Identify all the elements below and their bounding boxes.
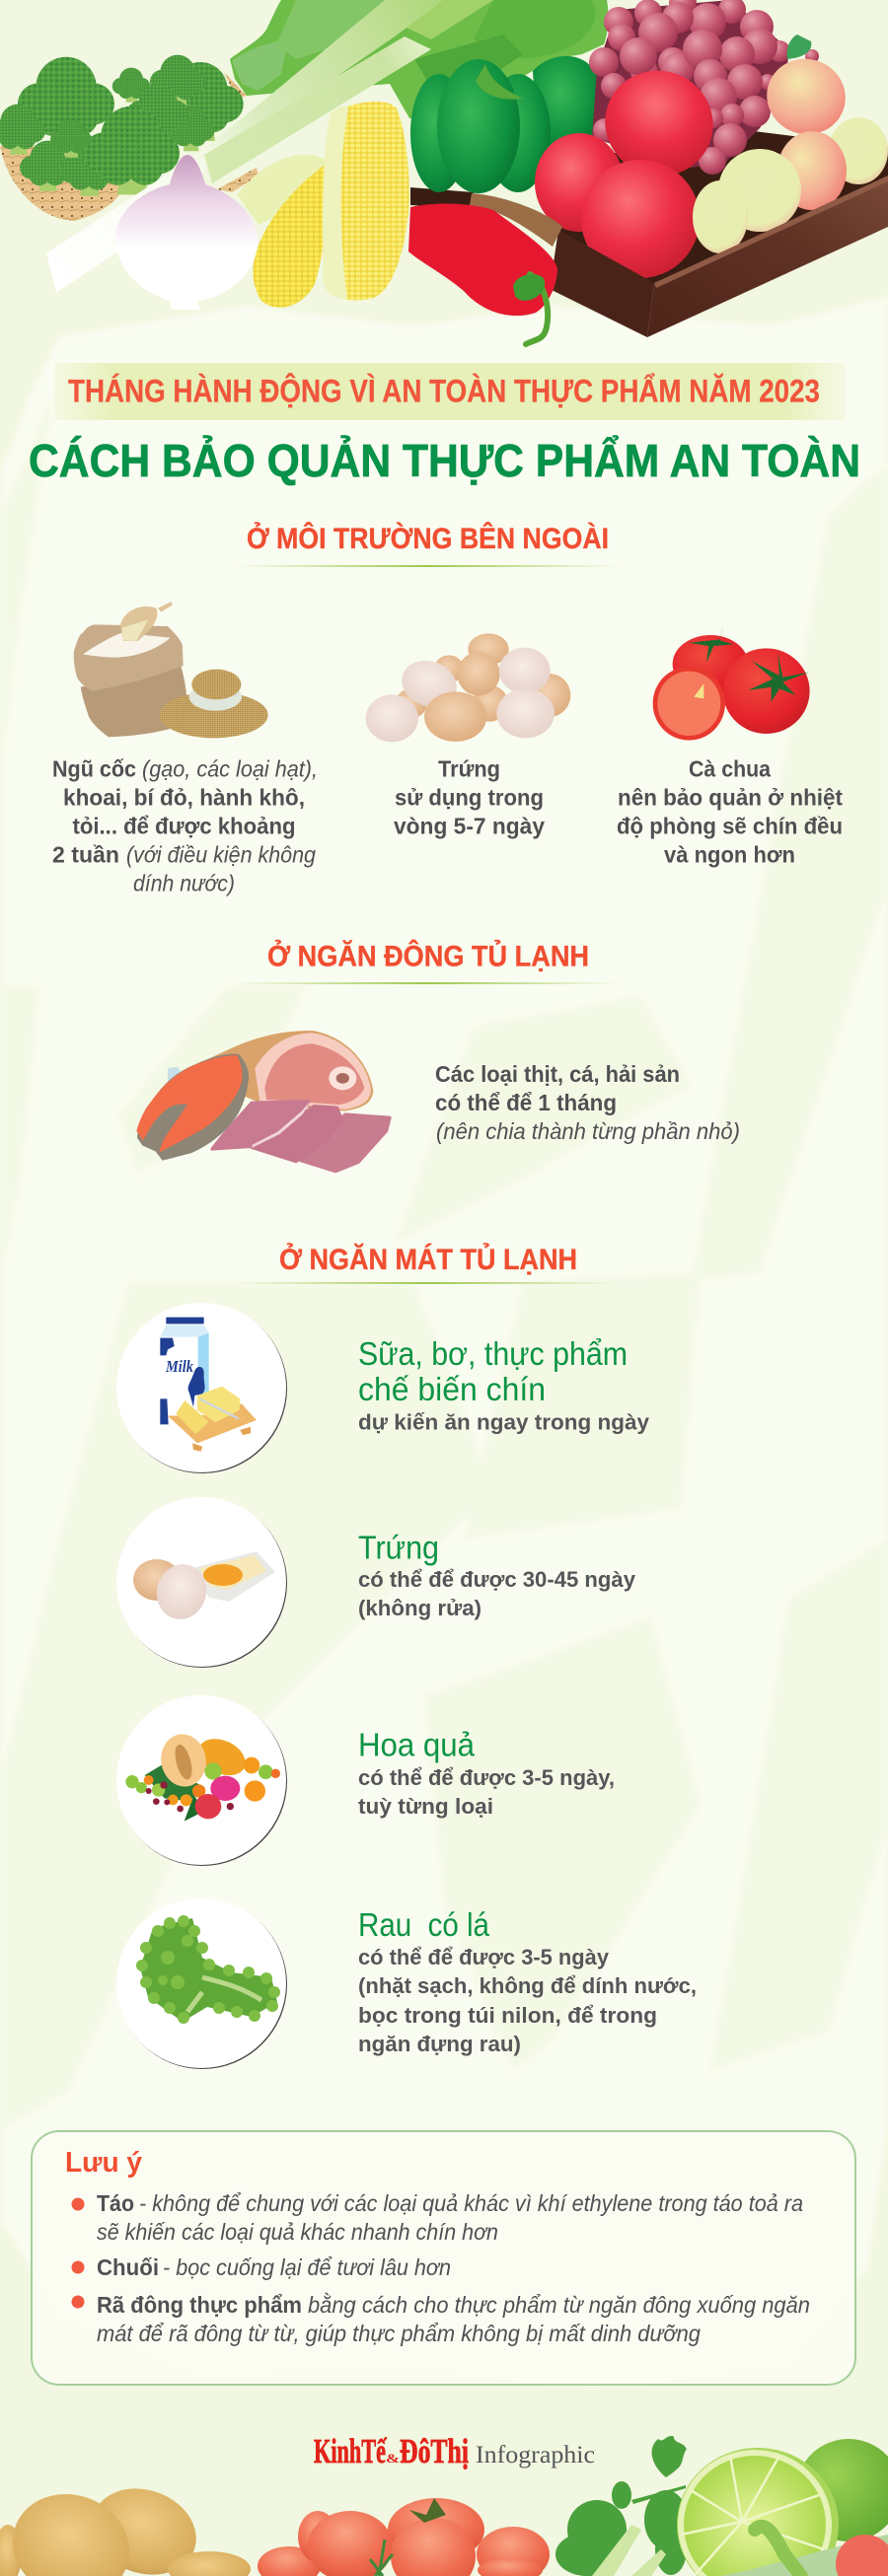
icon: rice sack	[74, 602, 186, 737]
text: dairy	[358, 1335, 650, 1434]
icon: whole lime	[796, 2439, 888, 2541]
heading: outside: Ở MÔI TRƯỜNG BÊN NGOÀI	[247, 522, 609, 555]
panel: freezer	[136, 1031, 740, 1172]
text: dairy: chế biến chín	[358, 1371, 546, 1407]
text: eggs fridge: có thể để được 30-45 ngày	[358, 1567, 636, 1592]
text: freezer: có thể để 1 tháng	[435, 1090, 617, 1115]
icon: meat and fish	[136, 1031, 390, 1172]
logo: KinhTế	[314, 2432, 388, 2470]
icon: eggs and bowl	[116, 1497, 287, 1668]
text: grains: (gạo, các loại hạt),	[142, 755, 318, 781]
text: grains	[52, 755, 318, 895]
note: apple: - không để chung với các loại quả khác vì khí ethylene trong táo toả ra	[139, 2190, 803, 2216]
illustration: bottom vegetables	[0, 2436, 888, 2576]
panel: dairy	[116, 1303, 650, 1473]
note: apple: Táo	[97, 2190, 134, 2216]
icon: tray interior	[410, 128, 888, 286]
icon: grape leaf	[786, 35, 811, 59]
illustration: vegetables and fruit tray	[0, 0, 888, 344]
note: apple: sẽ khiến các loại quả khác nhanh chín hơn	[97, 2219, 498, 2245]
text: eggs fridge	[358, 1529, 636, 1620]
text: grains: Ngũ cốc	[52, 755, 136, 781]
text: grains: tỏi... để được khoảng	[73, 813, 296, 838]
text: leafy vegetables: (nhặt sạch, không để dính nước,	[358, 1973, 697, 1998]
text: tomatoes outside: nên bảo quản ở nhiệt	[618, 785, 843, 811]
note: apple	[71, 2190, 803, 2245]
logo	[314, 2432, 595, 2470]
text: leafy vegetables: Rau có lá	[358, 1906, 490, 1943]
icon: large corn	[323, 102, 409, 300]
icon: onion	[115, 155, 258, 310]
text: tomatoes outside	[617, 755, 843, 868]
note: defrost: Rã đông thực phẩm	[97, 2292, 302, 2318]
text: eggs fridge: Trứng	[358, 1529, 439, 1566]
icon: red pepper	[408, 204, 557, 344]
text: eggs outside: Trứng	[438, 755, 500, 781]
text: leafy vegetables: bọc trong túi nilon, để trong	[358, 2003, 657, 2028]
icon: broccoli	[0, 55, 244, 196]
icon: lime slice	[677, 2448, 839, 2576]
icon: salmon steak	[168, 1067, 183, 1083]
heading: fridge: Ở NGĂN MÁT TỦ LẠNH	[279, 1243, 577, 1276]
text: leafy vegetables: ngăn đựng rau)	[358, 2032, 521, 2056]
text: grains: 2 tuần	[52, 842, 119, 868]
icon: fruit pile	[116, 1695, 287, 1866]
icon: grain pile	[160, 670, 268, 738]
text: leafy vegetables	[358, 1906, 697, 2056]
icon: cilantro	[555, 2436, 688, 2576]
text: freezer: (nên chia thành từng phần nhỏ)	[436, 1118, 740, 1144]
text: grains: khoai, bí đỏ, hành khô,	[63, 785, 305, 811]
text: eggs outside: sử dụng trong	[395, 785, 544, 811]
logo: &	[386, 2451, 400, 2466]
icon: potatoes	[0, 2474, 251, 2576]
panel: eggs fridge	[116, 1497, 636, 1668]
icon: milk and butter: Milk	[165, 1357, 193, 1376]
title band	[54, 363, 846, 420]
icon: egg pile	[366, 633, 570, 742]
icon: bottom tomatoes	[258, 2498, 550, 2576]
text: dairy: Sữa, bơ, thực phẩm	[358, 1335, 628, 1372]
text: grains: dính nước)	[133, 870, 235, 895]
text: leafy vegetables: có thể để được 3-5 ngày	[358, 1945, 610, 1969]
text: fruit	[358, 1726, 615, 1819]
icon: tomatoes	[535, 53, 730, 278]
icon: lettuce	[230, 0, 608, 123]
icon: basket	[0, 72, 259, 221]
text: freezer: Các loại thịt, cá, hải sản	[435, 1061, 680, 1087]
icon: milk and butter	[116, 1303, 287, 1473]
panel: leafy vegetables	[116, 1898, 697, 2069]
note: banana: - bọc cuống lại để tươi lâu hơn	[163, 2254, 451, 2280]
heading: freezer: Ở NGĂN ĐÔNG TỦ LẠNH	[267, 939, 589, 972]
note: defrost: bằng cách cho thực phẩm từ ngăn đông xuống ngăn	[308, 2292, 810, 2318]
icon: pork slices	[301, 1114, 390, 1172]
text: eggs outside	[394, 755, 545, 838]
heading: notes: Lưu ý	[65, 2147, 142, 2179]
icon: green peppers	[410, 56, 602, 193]
text: tomatoes outside: Cà chua	[689, 755, 771, 781]
text: tomatoes outside: và ngon hơn	[664, 842, 795, 868]
note: defrost	[71, 2292, 810, 2346]
icon: lettuce	[116, 1898, 287, 2069]
logo: ĐôThị	[400, 2432, 469, 2470]
icon: grapes	[589, 0, 819, 175]
panel: grains	[52, 602, 318, 895]
text: fruit: có thể để được 3-5 ngày,	[358, 1765, 615, 1790]
text: grains: (với điều kiện không	[126, 842, 316, 868]
icon: leaf and pepper	[720, 2527, 888, 2576]
text: fruit: Hoa quả	[358, 1726, 476, 1763]
text: eggs fridge: (không rửa)	[358, 1596, 481, 1620]
panel: fruit	[116, 1695, 615, 1866]
icon: tray handle	[470, 193, 562, 247]
note: banana: Chuối	[97, 2254, 159, 2280]
icon: small corn	[237, 155, 328, 308]
note: defrost: mát để rã đông từ từ, giúp thực phẩm không bị mất dinh dưỡng	[97, 2321, 701, 2346]
text: eggs outside: vòng 5-7 ngày	[394, 813, 545, 838]
text: dairy: dự kiến ăn ngay trong ngày	[358, 1410, 650, 1434]
panel: notes	[32, 2131, 855, 2385]
panel: eggs outside	[366, 633, 570, 838]
icon: ham	[185, 1031, 373, 1111]
icon: wooden tray	[550, 176, 888, 337]
panel: tomatoes outside	[617, 624, 843, 868]
icon: leek stalks	[46, 0, 493, 293]
icon: tomatoes	[653, 624, 810, 741]
text: fruit: tuỳ từng loại	[358, 1794, 493, 1819]
text: freezer	[435, 1061, 740, 1144]
text: tomatoes outside: độ phòng sẽ chín đều	[617, 813, 843, 838]
icon: peaches	[693, 48, 888, 253]
logo: Infographic	[476, 2442, 595, 2469]
